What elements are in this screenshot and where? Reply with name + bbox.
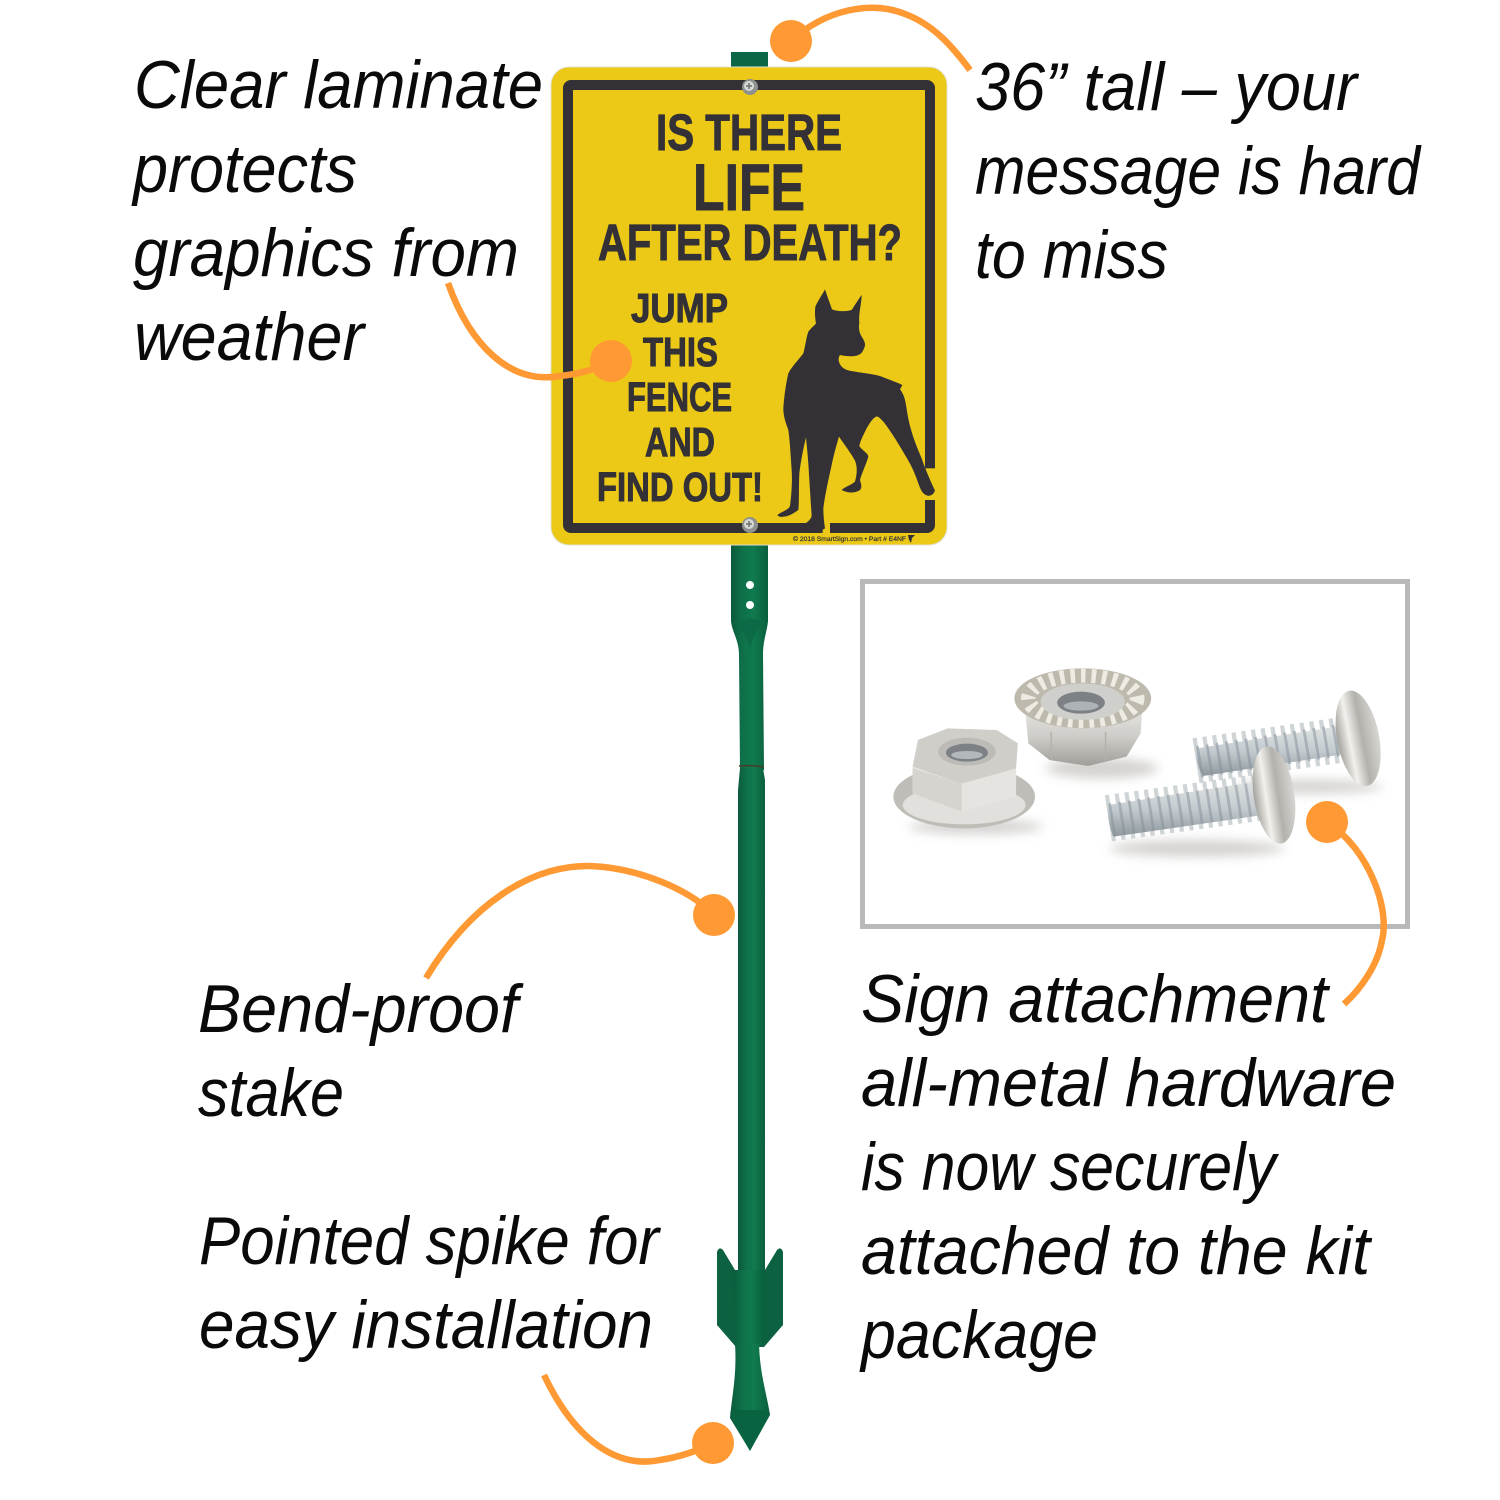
- connector and dot: [426, 866, 735, 978]
- connector and dot: [770, 8, 970, 70]
- callout text: Sign attachment: [861, 961, 1331, 1037]
- sign message: FIND OUT!: [597, 464, 763, 510]
- panel frame: [862, 582, 1408, 926]
- copyright line: © 2018 SmartSign.com • Part # E4NF: [793, 535, 906, 543]
- front bolt: [1108, 744, 1301, 846]
- callout: bend-proof stake: [198, 866, 735, 1131]
- callout text: weather: [134, 299, 366, 375]
- callout text: package: [859, 1297, 1098, 1373]
- yellow sign: [551, 67, 947, 545]
- callout: sign attachment hardware: [859, 801, 1396, 1373]
- callout text: Bend-proof: [198, 971, 524, 1047]
- callout text: [859, 961, 1396, 1373]
- sign border: [568, 85, 930, 528]
- top screw: [742, 79, 758, 95]
- callout text: [198, 971, 524, 1131]
- sign message: [597, 285, 763, 510]
- callout: 36 inch tall: [770, 8, 1422, 293]
- callout text: to miss: [975, 217, 1168, 293]
- callout text: easy installation: [199, 1287, 653, 1363]
- sign heading: LIFE: [693, 150, 805, 224]
- bottom screw: [742, 517, 758, 533]
- hardware shadows: [909, 758, 1383, 857]
- sign message: JUMP: [631, 285, 728, 331]
- connector and dot: [544, 1375, 734, 1464]
- callout text: Clear laminate: [134, 47, 543, 123]
- dog silhouette: [777, 289, 937, 534]
- hardware photo panel: [862, 582, 1408, 926]
- sign heading: AFTER DEATH?: [598, 214, 902, 271]
- connector and dot: [448, 283, 632, 382]
- sign board: [551, 67, 947, 545]
- callout text: attached to the kit: [861, 1213, 1373, 1289]
- sign message: AND: [645, 419, 715, 465]
- callout text: [131, 47, 543, 375]
- callout text: [975, 49, 1422, 293]
- callout text: stake: [198, 1055, 344, 1131]
- callout text: all-metal hardware: [861, 1045, 1396, 1121]
- rear bolt: [1196, 687, 1388, 789]
- serrated flange nut: [1014, 668, 1151, 766]
- sign message: FENCE: [627, 374, 732, 420]
- green stake: [717, 52, 783, 1451]
- hex flange nut: [893, 728, 1035, 828]
- ground spike fins: [717, 1248, 783, 1347]
- callout: clear laminate: [131, 47, 632, 382]
- callout: pointed spike: [199, 1203, 734, 1464]
- callout text: message is hard: [975, 133, 1422, 209]
- sign heading: [598, 104, 902, 271]
- callout text: graphics from: [133, 215, 519, 291]
- callout text: Pointed spike for: [199, 1203, 661, 1279]
- callout text: protects: [131, 131, 357, 207]
- callout text: [199, 1203, 661, 1363]
- spike tip: [730, 1344, 770, 1451]
- callout text: 36” tall – your: [975, 49, 1359, 125]
- sign heading: IS THERE: [656, 104, 842, 161]
- connector and dot: [1306, 801, 1384, 1004]
- sign message: THIS: [643, 329, 718, 375]
- stake upper section with holes: [731, 545, 768, 770]
- stake shaft: [738, 768, 765, 1275]
- callout text: is now securely: [861, 1129, 1280, 1205]
- stake top tab: [731, 52, 768, 72]
